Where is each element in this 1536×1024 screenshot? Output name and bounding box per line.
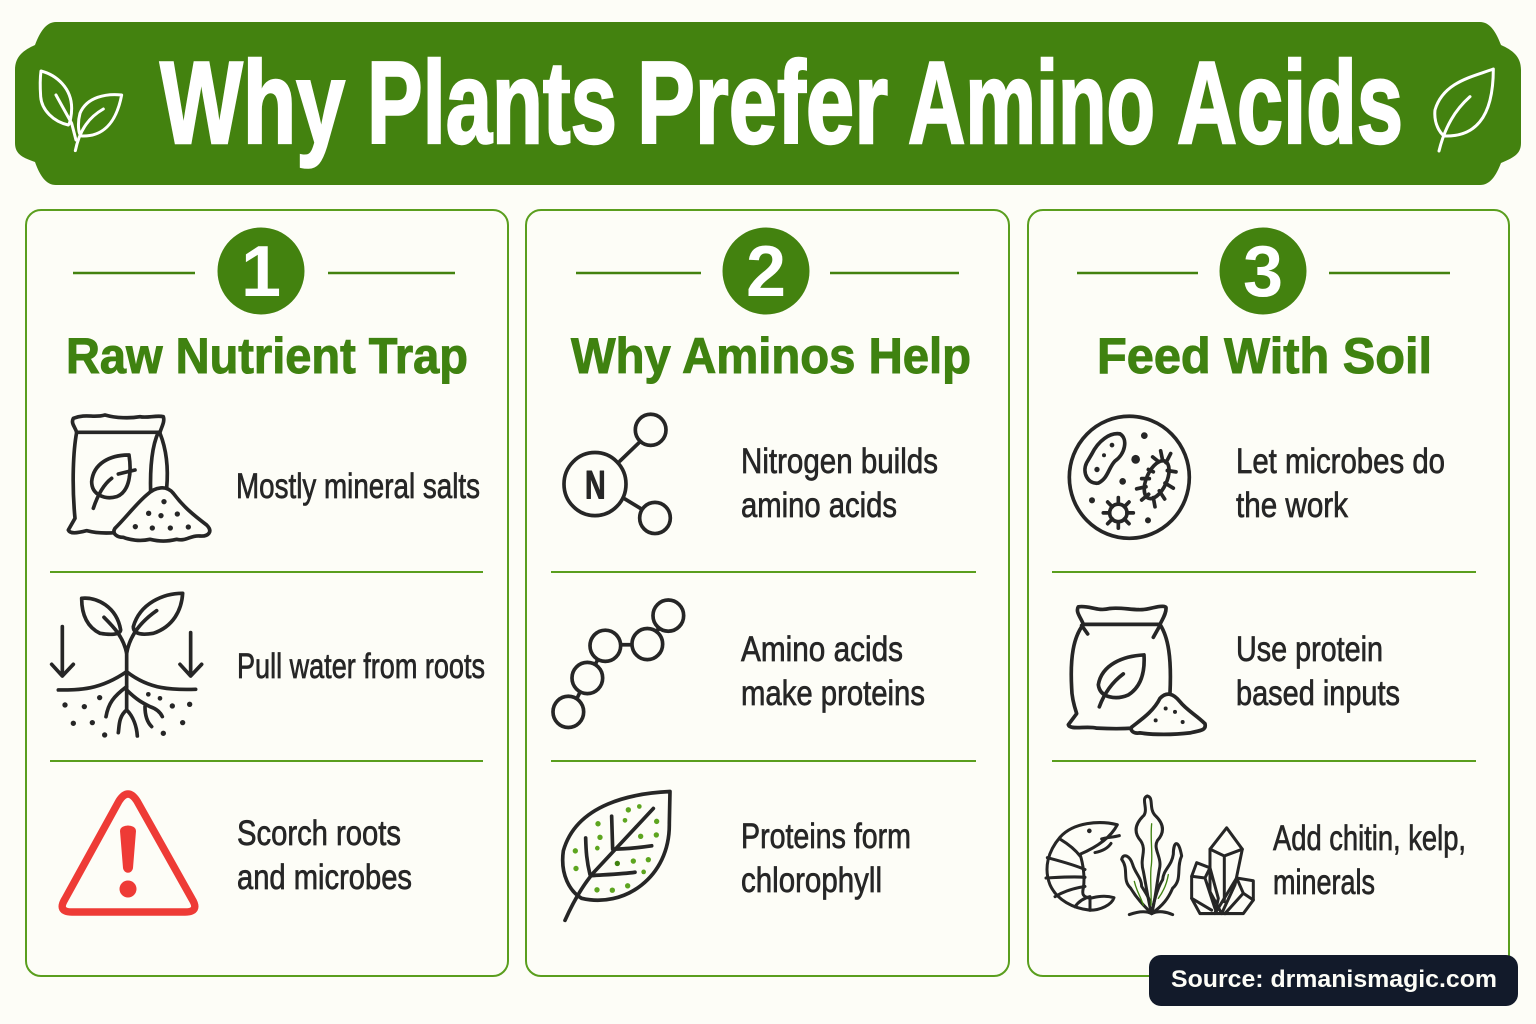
text: amino acids make proteins [741, 630, 925, 713]
number badge 1 [73, 228, 455, 314]
icon: nitrogen molecule: N [585, 463, 606, 507]
text: use protein based inputs: Use protein [1236, 630, 1383, 669]
heading: Raw Nutrient Trap [66, 328, 468, 384]
text: nitrogen builds amino acids: amino acids [741, 486, 897, 525]
title text: Acids [1177, 37, 1403, 168]
text: proteins form chlorophyll: Proteins form [741, 817, 911, 856]
number badge 3: 3 [1243, 232, 1283, 312]
title text [160, 37, 1403, 168]
text: add chitin, kelp, minerals [1273, 819, 1466, 902]
title text: Why [160, 37, 345, 168]
text: add chitin, kelp, minerals: Add chitin, kelp, [1273, 819, 1466, 858]
icon: plant roots with arrows [52, 593, 202, 738]
source badge: Source: drmanismagic.com [1171, 966, 1497, 993]
heading: Feed With Soil [1097, 328, 1432, 384]
icon: sprout in banner [40, 71, 122, 151]
heading: Why Aminos Help [571, 328, 971, 384]
panel: raw nutrient trap [26, 210, 508, 976]
text: nitrogen builds amino acids [741, 442, 938, 525]
text: pull water from roots: Pull water from roots [237, 647, 485, 686]
text: use protein based inputs: based inputs [1236, 674, 1400, 713]
text: proteins form chlorophyll: chlorophyll [741, 861, 882, 900]
icon: nitrogen molecule [564, 414, 670, 534]
text: amino acids make proteins: Amino acids [741, 630, 903, 669]
text: let microbes do the work: Let microbes do [1236, 442, 1445, 481]
number badge 1: 1 [241, 232, 281, 312]
title text: Prefer [637, 37, 888, 168]
text: scorch roots and microbes: and microbes [237, 858, 412, 897]
text: nitrogen builds amino acids: Nitrogen builds [741, 442, 938, 481]
title text: Plants [367, 37, 617, 168]
icon: leaf with chlorophyll dots [563, 792, 670, 920]
number badge 3 [1077, 228, 1450, 314]
text: add chitin, kelp, minerals: minerals [1273, 863, 1375, 902]
icon: shrimp, kelp and crystals [1046, 796, 1253, 915]
title banner [15, 22, 1521, 185]
text: let microbes do the work: the work [1236, 486, 1348, 525]
icon: warning triangle [62, 794, 195, 912]
number badge 2 [576, 228, 959, 314]
text: mostly mineral salts: Mostly mineral salts [236, 467, 480, 506]
title text: Amino [908, 37, 1155, 168]
text: let microbes do the work [1236, 442, 1445, 525]
icon: leaf in banner [1435, 69, 1493, 151]
text: amino acids make proteins: make proteins [741, 674, 925, 713]
panel: why aminos help [526, 210, 1009, 976]
icon: amino acid chain [553, 600, 684, 727]
text: scorch roots and microbes [237, 814, 412, 897]
source badge [1149, 955, 1518, 1006]
text: use protein based inputs [1236, 630, 1400, 713]
number badge 2: 2 [746, 232, 786, 312]
text: scorch roots and microbes: Scorch roots [237, 814, 401, 853]
panel: feed with soil [1028, 210, 1509, 976]
text: proteins form chlorophyll [741, 817, 911, 900]
icon: protein input bag [1068, 606, 1205, 734]
icon: soil microbes [1069, 416, 1189, 538]
icon: fertilizer bag [68, 415, 210, 541]
